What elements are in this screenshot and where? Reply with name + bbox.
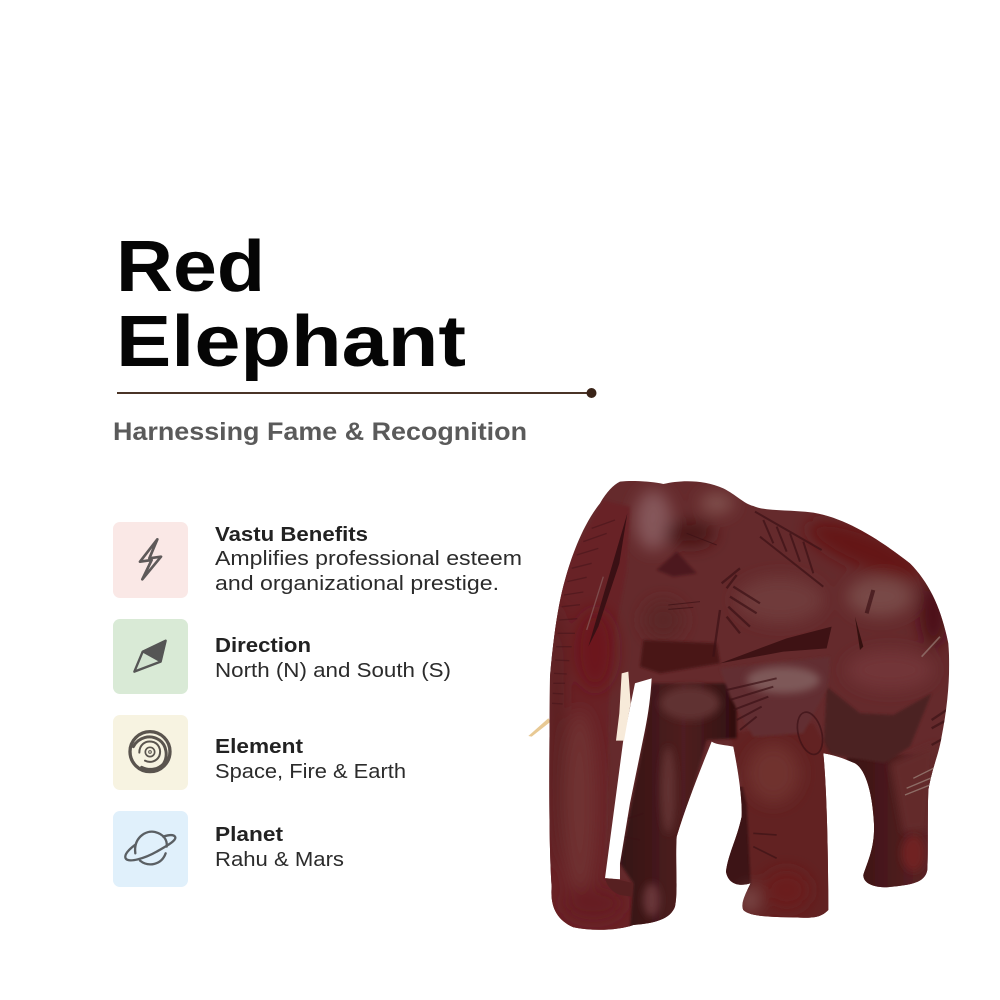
far tusk <box>528 718 551 737</box>
text: vastu benefits <box>215 524 522 595</box>
carvings <box>623 512 947 858</box>
near front leg <box>730 723 832 920</box>
shoulder fold <box>724 682 828 736</box>
text: vastu benefits: and organizational prestige. <box>215 573 499 595</box>
icon: compass needle <box>113 619 188 694</box>
elephant figurine <box>528 481 950 930</box>
ear slit <box>588 513 627 647</box>
title: Elephant <box>116 302 466 382</box>
text: planet: Rahu & Mars <box>215 849 344 871</box>
text: vastu benefits: Vastu Benefits <box>215 524 368 546</box>
text: element: Space, Fire & Earth <box>215 761 406 783</box>
trunk tip <box>605 878 633 897</box>
item: planet <box>113 811 344 887</box>
icon: spiral <box>113 715 188 790</box>
trunk ridges <box>552 520 615 704</box>
title <box>116 227 466 382</box>
title divider with dot <box>117 388 596 398</box>
text: planet: Planet <box>215 824 283 846</box>
tusk <box>616 672 631 741</box>
far front leg <box>726 786 752 890</box>
text: direction: North (N) and South (S) <box>215 660 451 682</box>
rear leg <box>847 753 935 890</box>
tusk groove <box>720 627 832 663</box>
icon: ringed planet <box>113 811 188 887</box>
item: vastu benefits <box>113 522 522 598</box>
chest and inner front leg <box>620 683 737 930</box>
belly hatching <box>823 687 932 763</box>
elephant body silhouette <box>549 481 950 930</box>
carved eye <box>657 552 697 577</box>
text: direction: Direction <box>215 635 311 657</box>
text: element <box>215 736 406 783</box>
item: direction <box>113 619 451 694</box>
small ear mark <box>855 617 863 650</box>
icon: lightning bolt <box>113 522 188 598</box>
text: vastu benefits: Amplifies professional esteem <box>215 548 522 570</box>
rear leg carving <box>904 768 934 796</box>
trunk colour <box>543 500 633 933</box>
text: planet <box>215 824 344 871</box>
soft shading <box>635 490 947 690</box>
text: element: Element <box>215 736 303 758</box>
title: Red <box>116 227 265 307</box>
gap between trunk and front leg <box>605 678 652 879</box>
subtitle: Harnessing Fame & Recognition <box>113 418 527 446</box>
item: element <box>113 715 406 790</box>
text: direction <box>215 635 451 682</box>
cheek shade <box>640 640 720 673</box>
